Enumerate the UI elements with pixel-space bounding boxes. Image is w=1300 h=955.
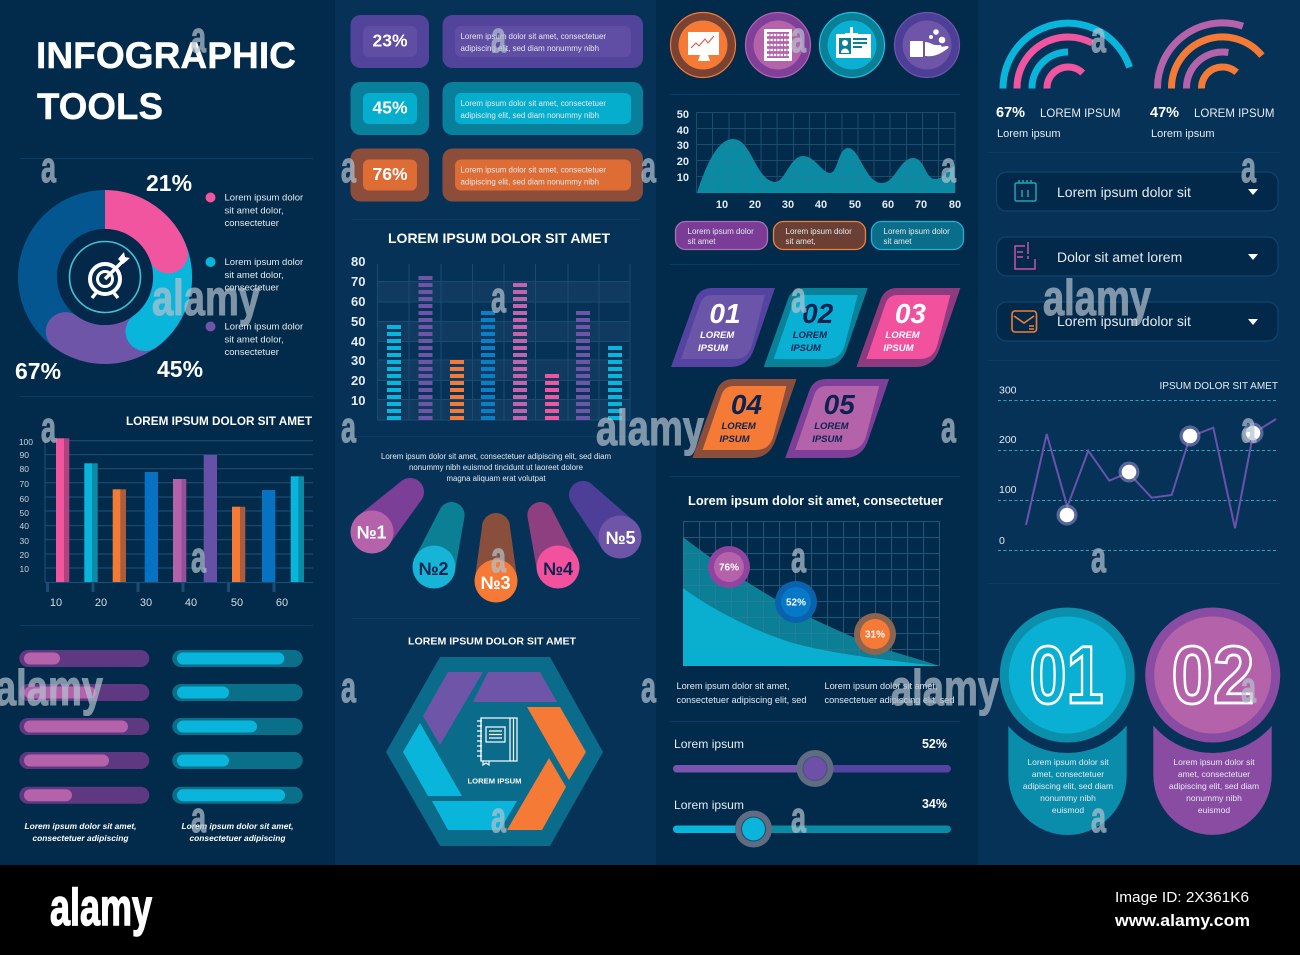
- icon badge: monitor: [670, 12, 736, 78]
- segmented chart heading: LOREM IPSUM DOLOR SIT AMET: [388, 230, 610, 246]
- stock watermarks: alamy: [596, 400, 704, 456]
- donut legend: Lorem ipsum dolor: [224, 322, 303, 332]
- stock watermarks: a: [1091, 793, 1106, 842]
- stock watermarks: a: [941, 403, 956, 452]
- stock watermarks: a: [941, 143, 956, 192]
- stock watermarks: a: [191, 13, 206, 62]
- cylinder: No4: [527, 502, 580, 588]
- legend pill: purple: [676, 222, 768, 250]
- segmented bar chart: 60: [351, 294, 365, 309]
- stock watermarks: alamy: [152, 270, 260, 326]
- donut chart: [38, 210, 188, 345]
- stock watermarks: alamy: [891, 660, 999, 716]
- area chart: 30: [782, 199, 794, 211]
- segmented bar chart: [351, 254, 630, 420]
- numbered card 02: adipiscing elit, sed diam: [1169, 781, 1259, 791]
- stat row: 23%: 23%: [372, 30, 408, 50]
- area chart: [677, 109, 961, 211]
- progress captions: consectetuer adipiscing: [190, 833, 286, 843]
- paragraph above cylinders: Lorem ipsum dolor sit amet, consectetuer adipiscing elit, sed diam: [381, 452, 611, 461]
- segmented bar chart: 20: [351, 373, 365, 388]
- stock watermarks: a: [1241, 403, 1256, 452]
- numbered card 01: adipiscing elit, sed diam: [1023, 781, 1113, 791]
- stock watermarks: a: [341, 403, 356, 452]
- bar chart: 30: [20, 536, 29, 546]
- tag 01: LOREM: [700, 330, 735, 341]
- tag 02: 02: [802, 298, 834, 329]
- tag 05: LOREM: [814, 421, 850, 432]
- icon: note: [1015, 242, 1035, 269]
- tag 05: [785, 379, 889, 458]
- slider 34%: Lorem ipsum: [674, 798, 744, 812]
- donut percentages: 21%: [146, 170, 192, 196]
- tag 01: 01: [709, 298, 741, 329]
- stat row: 23%: adipiscing elit, sed diam nonummy nibh: [460, 44, 599, 53]
- numbered card 01: nonummy nibh: [1040, 793, 1096, 803]
- donut legend: sit amet dolor,: [224, 334, 284, 346]
- legend pill: brown: sit amet,: [786, 237, 816, 246]
- stat row: 23%: Lorem ipsum dolor sit amet, consectetuer: [460, 32, 606, 41]
- area chart: 10: [677, 172, 689, 184]
- bar chart heading: LOREM IPSUM DOLOR SIT AMET: [126, 414, 313, 428]
- segmented bar chart: 80: [351, 254, 365, 269]
- hexagon heading: LOREM IPSUM DOLOR SIT AMET: [408, 636, 576, 648]
- area chart: 40: [815, 199, 827, 211]
- line chart: IPSUM DOLOR SIT AMET: [1160, 381, 1278, 392]
- stock watermarks: a: [791, 273, 806, 322]
- paragraph above cylinders: magna aliquam erat volutpat: [446, 474, 546, 483]
- legend pill: teal: Lorem ipsum dolor: [884, 227, 950, 236]
- arc gauge 47%: Lorem ipsum: [1151, 128, 1215, 140]
- arc gauge 47%: 47%: [1150, 105, 1179, 121]
- stock watermarks: alamy: [1043, 270, 1151, 326]
- icon badge: hand: [894, 12, 960, 78]
- icon: notebook: [477, 718, 517, 765]
- decay chart captions: consectetuer adipiscing elit, sed: [676, 695, 806, 705]
- donut percentages: 45%: [157, 356, 203, 382]
- donut legend: consectetuer: [224, 347, 279, 358]
- stock watermarks: a: [341, 143, 356, 192]
- footer: logo and image id: alamy: [50, 879, 152, 937]
- cylinder: No2: №2: [418, 559, 449, 579]
- tag 05: 05: [824, 389, 855, 420]
- dropdown: mail: Lorem ipsum dolor sit: [1057, 313, 1191, 329]
- tag 04: 04: [731, 389, 762, 420]
- progress captions: consectetuer adipiscing: [32, 833, 129, 843]
- dropdown: mail: [996, 302, 1278, 341]
- legend pill: brown: [774, 222, 866, 250]
- stat row: 45%: [350, 82, 643, 135]
- hexagon diagram: LOREM IPSUM: [468, 778, 522, 786]
- tag 03: 03: [895, 298, 926, 329]
- decay chart captions: consectetuer adipiscing elit, sed: [824, 695, 954, 705]
- slider 52%: [673, 737, 951, 787]
- cylinder: No3: №3: [480, 573, 511, 593]
- stat row: 76%: [350, 148, 643, 202]
- segmented bar chart: 50: [351, 314, 365, 329]
- decay area chart: [683, 521, 940, 666]
- paragraph above cylinders: nonummy nibh euismod tincidunt ut laoreet dolore: [409, 463, 584, 472]
- stat row: 76%: 76%: [372, 164, 408, 184]
- title: TOOLS: [37, 85, 163, 127]
- marker 76%: [708, 546, 750, 588]
- stat row: 45%: Lorem ipsum dolor sit amet, consectetuer: [460, 99, 606, 108]
- line chart: 0: [999, 535, 1005, 547]
- donut legend: consectetuer: [224, 218, 279, 229]
- tag 03: [856, 288, 960, 367]
- marker 76%: 76%: [719, 562, 739, 574]
- segmented bar chart: 10: [351, 393, 365, 408]
- numbered card 02: amet, consectetuer: [1178, 769, 1250, 779]
- stat row: 23%: [350, 15, 643, 68]
- numbered card 02: Lorem ipsum dolor sit: [1173, 757, 1255, 767]
- arc gauge 47%: LOREM IPSUM: [1194, 108, 1275, 120]
- decay chart captions: [676, 681, 954, 705]
- legend pill: purple: sit amet: [688, 237, 716, 246]
- arc gauge 67%: Lorem ipsum: [997, 128, 1061, 140]
- line chart: 200: [999, 434, 1017, 446]
- stock watermarks: a: [41, 143, 56, 192]
- progress captions: Lorem ipsum dolor sit amet,: [182, 821, 294, 831]
- bar chart: 20: [95, 597, 107, 609]
- area chart: 40: [677, 125, 689, 137]
- tag 04: IPSUM: [720, 434, 751, 445]
- icon: target: [90, 252, 130, 298]
- slider 34%: 34%: [922, 797, 947, 811]
- bar chart: 40: [20, 521, 29, 531]
- stat row: 45%: adipiscing elit, sed diam nonummy nibh: [460, 111, 599, 120]
- arc gauge 67%: [996, 23, 1130, 140]
- stat row: 76%: adipiscing elit, sed diam nonummy nibh: [460, 178, 599, 186]
- numbered card 02: [1135, 597, 1291, 835]
- progress bars: purple: [19, 650, 149, 804]
- icon badge: abacus: [746, 12, 810, 78]
- arc gauge 67%: 67%: [996, 105, 1025, 121]
- donut legend: sit amet dolor,: [224, 206, 284, 216]
- segmented bar chart: 70: [351, 274, 365, 289]
- numbered card 01: [989, 597, 1145, 835]
- area chart: 50: [849, 199, 861, 211]
- paragraph above cylinders: [381, 452, 611, 483]
- bar chart: 10: [20, 564, 29, 574]
- cylinder: No1: [350, 478, 424, 554]
- icon: mail: [1012, 311, 1036, 332]
- bar chart: 80: [20, 464, 29, 474]
- stat row: 45%: 45%: [372, 98, 408, 118]
- area chart: 70: [915, 199, 927, 211]
- bar chart: 40: [185, 597, 197, 609]
- tag 02: [764, 288, 868, 367]
- tag 01: IPSUM: [698, 343, 729, 354]
- numbered card 01: Lorem ipsum dolor sit: [1027, 757, 1109, 767]
- bar chart: 90: [20, 450, 29, 460]
- progress captions: [24, 821, 294, 843]
- tag 04: [692, 379, 796, 458]
- title: [36, 34, 296, 127]
- numbered card 02: euismod: [1198, 805, 1230, 815]
- stock watermarks: a: [491, 793, 506, 842]
- donut legend: Lorem ipsum dolor: [224, 257, 303, 268]
- icon: calendar: [1015, 180, 1036, 201]
- legend pill: teal: sit amet: [884, 237, 912, 246]
- footer: logo and image id: Image ID: 2X361K6: [1115, 889, 1249, 906]
- progress captions: Lorem ipsum dolor sit amet,: [24, 821, 136, 831]
- cylinder: No5: №5: [605, 528, 636, 548]
- area chart: 30: [677, 140, 689, 152]
- dropdown: calendar: Lorem ipsum dolor sit: [1057, 184, 1191, 200]
- stock watermarks: a: [491, 273, 506, 322]
- footer: logo and image id: www.alamy.com: [1114, 912, 1250, 930]
- dropdown: note: Dolor sit amet lorem: [1057, 249, 1182, 265]
- legend pill: brown: Lorem ipsum dolor: [786, 227, 852, 236]
- stock watermarks: a: [491, 533, 506, 582]
- numbered card 01: euismod: [1052, 805, 1084, 815]
- area chart: 20: [749, 199, 761, 211]
- tag 03: IPSUM: [883, 343, 915, 354]
- stock watermarks: a: [791, 13, 806, 62]
- hexagon diagram: [386, 657, 603, 846]
- segmented bar chart: 40: [351, 334, 365, 349]
- segmented bar chart: 30: [351, 353, 365, 368]
- footer: logo and image id: [0, 865, 1300, 955]
- area chart: 50: [677, 109, 689, 121]
- stock watermarks: a: [1241, 663, 1256, 712]
- dropdown: calendar: [996, 172, 1278, 211]
- donut legend: Lorem ipsum dolor: [224, 192, 303, 204]
- bar chart: 50: [231, 597, 243, 609]
- stock watermarks: a: [191, 793, 206, 842]
- stock watermarks: a: [191, 533, 206, 582]
- bar chart: 10: [50, 597, 62, 609]
- donut percentages: 67%: [15, 358, 61, 384]
- slider 52%: 52%: [922, 737, 947, 751]
- slider 52%: Lorem ipsum: [674, 737, 744, 751]
- numbered card 01: 01: [1030, 630, 1104, 721]
- dropdown: note: [996, 237, 1278, 276]
- area chart: 60: [882, 199, 894, 211]
- bar chart: 70: [20, 479, 29, 489]
- stock watermarks: a: [491, 13, 506, 62]
- area chart: 80: [949, 199, 961, 211]
- marker 52%: 52%: [786, 598, 806, 608]
- marker 31%: [854, 613, 896, 655]
- stock watermarks: a: [641, 143, 656, 192]
- cylinder: No2: [412, 502, 465, 588]
- arc gauge 67%: LOREM IPSUM: [1040, 108, 1121, 120]
- stock watermarks: a: [641, 663, 656, 712]
- bar chart: 20: [20, 550, 29, 560]
- tag 05: IPSUM: [812, 434, 843, 445]
- icon badge: id card: [820, 12, 884, 78]
- line chart: [998, 381, 1278, 550]
- stat row: 76%: Lorem ipsum dolor sit amet, consectetuer: [460, 166, 606, 174]
- donut legend: consectetuer: [224, 282, 279, 294]
- numbered card 01: amet, consectetuer: [1032, 769, 1104, 779]
- stock watermarks: a: [1241, 143, 1256, 192]
- donut percentages: [15, 170, 203, 384]
- legend pill: purple: Lorem ipsum dolor: [688, 227, 754, 236]
- cylinder: No4: №4: [543, 559, 573, 579]
- donut legend: sit amet dolor,: [224, 270, 284, 281]
- progress bars: cyan: [172, 650, 303, 804]
- tag 03: LOREM: [885, 330, 921, 341]
- bar chart: [19, 437, 313, 609]
- cylinder: No5: [569, 481, 642, 558]
- area chart: 20: [677, 156, 689, 168]
- stock watermarks: a: [791, 533, 806, 582]
- bar chart: 60: [276, 597, 288, 609]
- area chart: 10: [716, 199, 728, 211]
- tag 02: LOREM: [793, 330, 828, 341]
- decay chart heading: Lorem ipsum dolor sit amet, consectetuer: [688, 494, 943, 508]
- numbered card 02: 02: [1172, 630, 1254, 721]
- tag 01: [671, 288, 775, 367]
- numbered card 02: nonummy nibh: [1186, 793, 1242, 803]
- legend pill: teal: [872, 222, 964, 250]
- cylinder: No3: [474, 513, 518, 602]
- stock watermarks: a: [1091, 533, 1106, 582]
- marker 52%: [775, 581, 817, 623]
- title: INFOGRAPHIC: [36, 34, 296, 76]
- decay chart captions: Lorem ipsum dolor sit amet,: [676, 681, 790, 691]
- stock watermarks: a: [41, 403, 56, 452]
- stock watermarks: a: [1091, 13, 1106, 62]
- marker 31%: 31%: [865, 630, 885, 640]
- slider 34%: [673, 797, 951, 848]
- donut legend: [206, 192, 303, 358]
- bar chart: 60: [20, 494, 29, 504]
- line chart: 100: [999, 484, 1017, 496]
- arc gauge 47%: [1150, 23, 1275, 140]
- cylinder: No1: №1: [356, 522, 387, 542]
- tag 02: IPSUM: [791, 343, 822, 354]
- bar chart: 50: [20, 508, 29, 518]
- tag 04: LOREM: [722, 421, 757, 432]
- line chart: 300: [999, 384, 1017, 396]
- decay chart captions: Lorem ipsum dolor sit amet,: [824, 681, 938, 691]
- stock watermarks: a: [791, 793, 806, 842]
- bar chart: 100: [19, 437, 33, 447]
- bar chart: 30: [140, 597, 152, 609]
- stock watermarks: a: [341, 663, 356, 712]
